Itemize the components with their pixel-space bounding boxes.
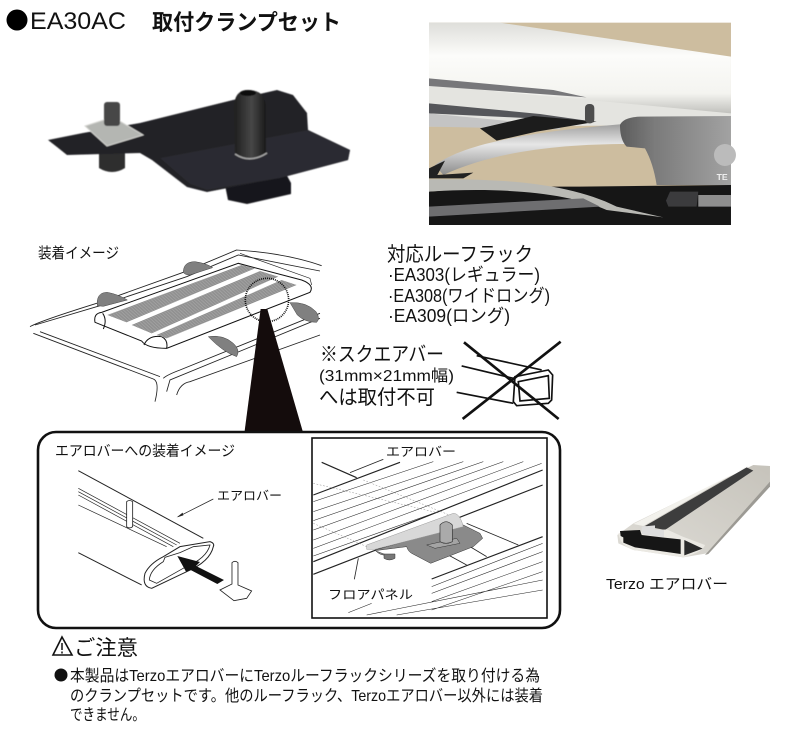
label: installation image: 装着イメージ: [38, 245, 119, 262]
bar end face: [144, 542, 214, 588]
notice line 3: できません。: [70, 706, 145, 724]
warning mark: [61, 643, 63, 654]
loose bolt: [220, 561, 252, 601]
clamp body: [375, 525, 483, 563]
notice: [53, 637, 543, 724]
bar inner section: [149, 545, 210, 583]
rack EA303: ·EA303(レギュラー): [388, 265, 540, 285]
rack EA309: ·EA309(ロング): [388, 306, 510, 326]
bar label leader: [178, 499, 213, 517]
photo: clamp set: [48, 90, 350, 204]
clamp stud under plate: [99, 150, 125, 172]
bar bottom edge: [78, 553, 142, 585]
bar edges: [313, 462, 543, 579]
floor leader: [354, 558, 358, 579]
clamp sleeve collar: [235, 153, 267, 159]
bar channel lines: [78, 488, 180, 547]
photo: roof rack on car: [429, 23, 736, 225]
detail box: [312, 438, 547, 618]
detail frame: [312, 438, 547, 618]
rack EA308: ·EA308(ワイドロング): [388, 286, 550, 306]
detail label: floor panel: [326, 582, 416, 600]
clamp threaded bolt: [104, 102, 120, 126]
panel lines: [448, 523, 518, 565]
warning line 1: ※スクエアバー: [320, 343, 444, 366]
illustration: car roof with rack: [30, 250, 322, 431]
title bullet: [6, 10, 28, 30]
bar upper highlight: [633, 466, 750, 526]
bar end face: [618, 529, 705, 557]
car outline: [30, 250, 322, 402]
car roof dark: [429, 185, 731, 225]
inserted bolt: [127, 500, 133, 528]
roof feet: [97, 262, 318, 357]
dashed hidden lines: [313, 480, 453, 547]
title name: 取付クランプセット: [152, 10, 341, 35]
foot cover: [620, 116, 731, 185]
curved arm: [435, 124, 627, 175]
pointer wedge: [245, 309, 303, 431]
clamp ghost plate: [367, 513, 463, 549]
lower light rail: [429, 113, 560, 129]
notice heading: ご注意: [74, 637, 138, 660]
panel frame: [38, 432, 560, 628]
title: [6, 8, 341, 35]
notice bullet: [54, 668, 68, 682]
clamp sleeve: [234, 90, 266, 159]
compatible racks text: [387, 243, 550, 326]
square bar warning text: [319, 343, 454, 409]
panel: aero bar installation: [38, 432, 560, 628]
warning line 3: へは取付不可: [319, 386, 435, 409]
rail shadow line: [429, 78, 587, 97]
rack strips: [107, 265, 297, 338]
aero bar label: エアロバー: [217, 489, 282, 503]
insert arrow: [177, 556, 224, 584]
clamp stud: [384, 554, 395, 560]
clamp under rack: [480, 116, 597, 141]
leader arrow: [177, 513, 183, 517]
bar T-slot: [642, 525, 664, 537]
rack frame: [95, 263, 311, 348]
clamp plate: [48, 90, 350, 192]
photo background: [429, 23, 731, 225]
zoom circle: [245, 278, 289, 322]
detail label text: フロアパネル: [328, 588, 413, 602]
bar top edge: [78, 471, 203, 538]
silver rail on car: [429, 179, 663, 217]
detail label: aero bar: エアロバー: [386, 445, 456, 459]
clamp sleeve hole: [240, 90, 256, 96]
square bar: [457, 356, 553, 406]
foot label: TE: [717, 172, 728, 182]
foot pad: [666, 192, 698, 207]
clamp washer: [85, 117, 143, 146]
clamp sleeve: [440, 522, 452, 543]
bar side cavity: [684, 540, 703, 555]
bar side highlight: [705, 482, 770, 555]
bar cavity: [620, 530, 681, 554]
caption: Terzo aero bar: Terzo エアロバー: [606, 576, 728, 593]
notice line 1: 本製品はTerzoエアロバーにTerzoルーフラックシリーズを取り付ける為: [70, 667, 540, 685]
warning line 2: (31mm×21mm幅): [319, 367, 454, 385]
rack end cap: [103, 313, 167, 348]
title code: EA30AC: [30, 8, 126, 35]
detail drawing: [313, 459, 543, 615]
clamp raised plate: [427, 538, 460, 548]
dark rail band: [429, 103, 593, 122]
clamp lower block: [225, 172, 291, 204]
car body: [429, 23, 731, 117]
photo: Terzo aero bar: [617, 465, 770, 557]
car rail lines: [429, 198, 600, 217]
silver band below body: [429, 85, 731, 127]
panel heading: エアロバーへの装着イメージ: [55, 443, 235, 460]
icon: crossed-out square bar: [457, 342, 561, 419]
logo badge: [714, 144, 736, 166]
bar top slot: [645, 467, 753, 530]
small post: [585, 104, 594, 123]
bar body: [617, 465, 770, 557]
arm end: [429, 161, 473, 178]
hatching: [313, 462, 543, 615]
clamp plate shading: [160, 130, 350, 190]
foot base: [698, 195, 731, 207]
compatible racks heading: 対応ルーフラック: [387, 243, 533, 266]
illustration: aero bar with bolt: [78, 471, 252, 601]
cross mark: [463, 342, 561, 419]
notice line 2: のクランプセットです。他のルーフラック、Terzoエアロバー以外には装着: [70, 687, 543, 705]
icon: warning triangle: [53, 637, 72, 655]
bar leader: [350, 459, 383, 473]
